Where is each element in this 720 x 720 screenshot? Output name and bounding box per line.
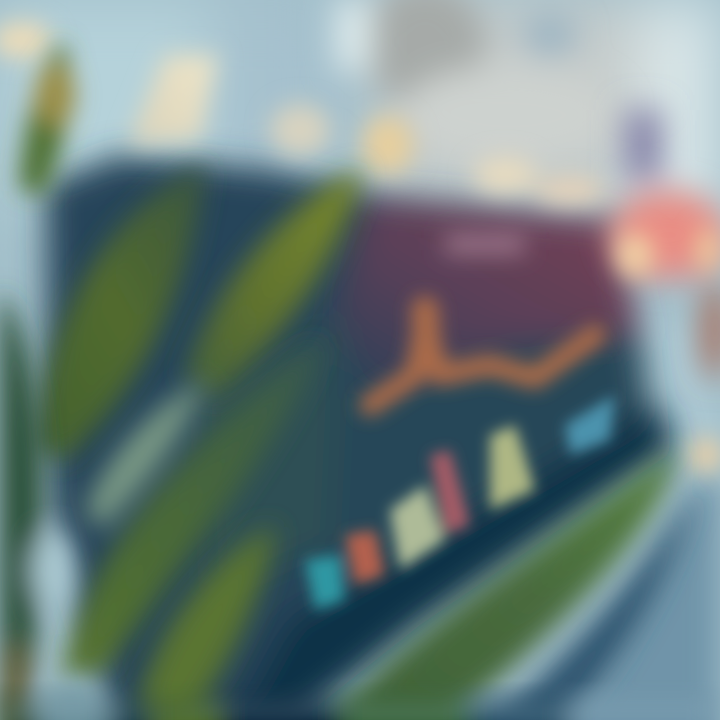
leaf: left edge dark (0, 290, 98, 720)
leaf: lower right long (335, 450, 695, 720)
colored bars on the chart (305, 395, 615, 610)
leaf: top left stem (20, 40, 75, 195)
orange chart line (370, 310, 595, 405)
leaf: large centre (185, 168, 362, 400)
background: smoke and window patches (335, 0, 620, 165)
dark chart board (45, 155, 675, 720)
leaf: lower centre (135, 525, 275, 720)
pink glow at right (610, 110, 720, 380)
bottom edge colour strip (0, 680, 720, 720)
background: bottom right water (575, 320, 720, 720)
warm cream highlights (0, 22, 720, 473)
leaf: mid diagonal (60, 340, 320, 680)
leaf: large upper left (35, 165, 205, 460)
